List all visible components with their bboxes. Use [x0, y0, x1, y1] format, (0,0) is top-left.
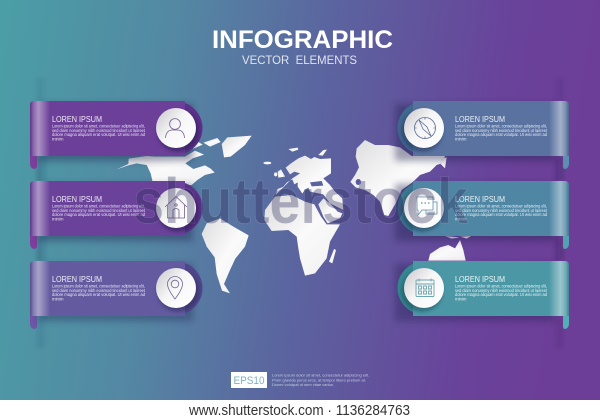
watermark: shutterstock — [133, 165, 468, 237]
heading: LOREN IPSUM — [455, 195, 505, 204]
ribbon curl — [563, 310, 569, 329]
ribbon highlight — [549, 261, 569, 316]
ribbon shadow — [38, 264, 193, 321]
end cap — [150, 182, 202, 234]
ribbon shadow — [38, 104, 193, 161]
body text: minim — [455, 296, 467, 302]
heading: LOREN IPSUM — [455, 115, 505, 124]
heading: LOREN IPSUM — [455, 275, 505, 284]
americas — [117, 136, 252, 293]
ribbon shadow — [395, 104, 555, 161]
shadow of disc — [157, 270, 199, 312]
icon: chat bubbles — [417, 197, 437, 215]
footer text — [272, 374, 369, 387]
body text: sed diam nonummy nibh euismod tincidunt ut laoreet — [455, 128, 548, 133]
body text — [455, 204, 548, 222]
heading: LOREN IPSUM — [52, 115, 102, 124]
ribbon curl — [30, 230, 37, 249]
ribbon shadow — [395, 184, 555, 241]
body text: dolore magna aliquam erat volutpat. Ut wisi enim ad — [455, 132, 548, 137]
footer text: Proin gravida purus eros, at tempor libero pretium at. — [272, 378, 366, 382]
panel: left row 1 — [30, 101, 202, 169]
icon disc — [404, 268, 444, 308]
body text: sed diam nonummy nibh euismod tincidunt ut laoreet — [52, 288, 146, 293]
icon: calendar — [416, 278, 434, 296]
panel: left row 3 — [30, 261, 202, 329]
body text: Lorem ipsum dolor sit amet, consectetuer adipiscing elit, — [52, 124, 145, 128]
shadow of disc — [401, 110, 443, 152]
body text: dolore magna aliquam erat volutpat. Ut wisi enim ad — [52, 212, 146, 217]
icon disc — [156, 108, 196, 148]
body text: dolore magna aliquam erat volutpat. Ut wisi enim ad — [455, 212, 548, 217]
heading: LOREN IPSUM — [52, 195, 102, 204]
shadow of disc — [157, 110, 199, 152]
icon disc — [156, 268, 196, 308]
body text: Lorem ipsum dolor sit amet, consectetuer adipiscing elit, — [52, 284, 145, 288]
icon: compass — [414, 118, 436, 138]
footer text: Lorem ipsum dolor sit amet, consectetur adipiscing elit. — [272, 374, 369, 378]
vertical ribbon shadows — [37, 78, 563, 348]
ribbon curl — [563, 230, 569, 249]
body text: dolore magna aliquam erat volutpat. Ut wisi enim ad — [52, 132, 146, 137]
body text — [455, 124, 548, 142]
title: VECTOR ELEMENTS — [242, 53, 357, 67]
ribbon highlight — [549, 181, 569, 236]
icon disc — [404, 108, 444, 148]
body text — [52, 204, 146, 222]
body text: sed diam nonummy nibh euismod tincidunt ut laoreet — [52, 128, 146, 133]
footer badge: EPS10 — [231, 372, 267, 388]
title: INFOGRAPHIC — [212, 26, 393, 54]
stock site caption: www.shutterstock.com · 1136284763 — [188, 403, 410, 419]
body text: sed diam nonummy nibh euismod tincidunt ut laoreet — [455, 208, 548, 213]
panel: left row 2 — [30, 181, 202, 249]
ribbon curl — [30, 150, 37, 169]
end cap — [398, 262, 450, 314]
shadow of disc — [401, 270, 443, 312]
body text: dolore magna aliquam erat volutpat. Ut wisi enim ad — [52, 292, 146, 297]
body text: minim — [52, 136, 64, 142]
icon: person — [166, 119, 184, 138]
europe and africa — [263, 148, 343, 276]
ribbon curl — [563, 150, 569, 169]
asia and australia — [350, 140, 471, 261]
ribbon body — [30, 181, 185, 236]
icon disc — [156, 188, 196, 228]
icon: house — [165, 196, 187, 218]
ribbon curl — [30, 310, 37, 329]
body text — [52, 124, 146, 142]
ribbon highlight — [549, 101, 569, 156]
ribbon shadow — [395, 264, 555, 321]
body text — [52, 284, 146, 302]
body text: minim — [52, 216, 64, 222]
end cap — [150, 102, 202, 154]
ribbon body — [413, 101, 569, 156]
ribbon body — [30, 261, 185, 316]
footer text: Donec volutpat ut sem vitae varius. — [272, 383, 334, 387]
world map — [117, 136, 471, 293]
ribbon body — [30, 101, 185, 156]
body text: Lorem ipsum dolor sit amet, consectetuer adipiscing elit, — [455, 284, 547, 288]
body text: Lorem ipsum dolor sit amet, consectetuer adipiscing elit, — [455, 124, 547, 128]
panel: right row 3 — [395, 261, 569, 329]
end cap — [398, 182, 450, 234]
ribbon highlight — [30, 101, 50, 156]
body text: minim — [52, 296, 64, 302]
ribbon body — [413, 261, 569, 316]
panel: right row 2 — [395, 181, 569, 249]
shadow of disc — [157, 190, 199, 232]
body text: minim — [455, 216, 467, 222]
body text: dolore magna aliquam erat volutpat. Ut wisi enim ad — [455, 292, 548, 297]
ribbon body — [413, 181, 569, 236]
body text: sed diam nonummy nibh euismod tincidunt ut laoreet — [52, 208, 146, 213]
shadow of disc — [401, 190, 443, 232]
body text — [455, 284, 548, 302]
panel: right row 1 — [395, 101, 569, 169]
icon: map pin — [168, 276, 182, 299]
ribbon highlight — [30, 181, 50, 236]
ribbon shadow — [38, 184, 193, 241]
icon disc — [404, 188, 444, 228]
end cap — [398, 102, 450, 154]
heading: LOREN IPSUM — [52, 275, 102, 284]
body text: Lorem ipsum dolor sit amet, consectetuer adipiscing elit, — [52, 204, 145, 208]
ribbon highlight — [30, 261, 50, 316]
body text: minim — [455, 136, 467, 142]
footer badge: EPS10: EPS10 — [234, 375, 264, 387]
body text: sed diam nonummy nibh euismod tincidunt ut laoreet — [455, 288, 548, 293]
title — [212, 26, 393, 67]
end cap — [150, 262, 202, 314]
body text: Lorem ipsum dolor sit amet, consectetuer adipiscing elit, — [455, 204, 547, 208]
